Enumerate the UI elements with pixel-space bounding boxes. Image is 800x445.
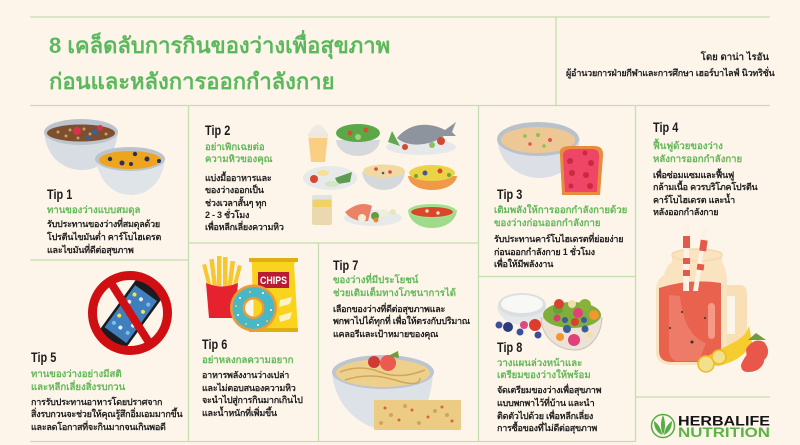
tip 6 text: และไม่ตอบสนองความหิว <box>202 383 296 393</box>
tip 8 text <box>497 339 602 434</box>
title <box>49 30 390 94</box>
tip 4 text: ฟื้นฟูด้วยของว่าง <box>653 140 723 152</box>
logo: Herbalife Nutrition <box>652 414 770 440</box>
icon: smoothie jar with fruit <box>656 225 768 372</box>
tip 1 text <box>46 186 161 256</box>
logo: Herbalife Nutrition: HERBALIFE <box>678 414 770 428</box>
tip 3 text: ก่อนออกกำลังกาย 1 ชั่วโมง <box>494 247 595 257</box>
tip 2 text: ของว่างออกเป็น <box>205 185 264 195</box>
tip 7 text: พกพาไปได้ทุกที่ เพื่อให้ตรงกับปริมาณ <box>333 316 470 326</box>
tip 3 text: รับประทานคาร์โบไฮเดรตที่ย่อยง่าย <box>494 234 623 244</box>
title: ก่อนและหลังการออกกำลังกาย <box>49 69 334 94</box>
tip 4 text: Tip 4 <box>653 119 678 135</box>
icon: fries, donut and chips: CHIPS <box>260 275 287 287</box>
tip 8 text: Tip 8 <box>497 339 522 355</box>
tip 1 text: และไขมันที่ดีต่อสุขภาพ <box>47 245 134 255</box>
tip 2 text: 2 - 3 ชั่วโมง <box>205 210 249 220</box>
tip 8 text: ติดตัวไปด้วย เพื่อหลีกเลี่ยง <box>497 411 593 421</box>
tip 7 text: Tip 7 <box>333 257 358 273</box>
tip 6 text: จะนำไปสู่การกินมากเกินไป <box>202 395 303 405</box>
title: 8 เคล็ดลับการกินของว่างเพื่อสุขภาพ <box>49 33 390 58</box>
tip 3 text: เพื่อให้มีพลังงาน <box>494 259 553 269</box>
tip 1 text: Tip 1 <box>47 186 72 202</box>
tip 6 text: อาหารพลังงานว่างเปล่า <box>202 370 289 380</box>
tip 1 text: ทานของว่างแบบสมดุล <box>47 204 140 216</box>
tip 3 text <box>494 186 627 269</box>
icon: tip 2 healthy food collection <box>303 122 457 228</box>
tip 2 text <box>205 122 284 232</box>
icon: cereal bowls <box>44 119 165 195</box>
logo: Herbalife Nutrition: NUTRITION <box>678 425 770 440</box>
tip 8 text: แบบพกพาไว้ที่บ้าน และนำ <box>497 398 594 408</box>
tip 5 text: สิ่งรบกวนจะช่วยให้คุณรู้สึกอิ่มเอมมากขึ้น <box>31 409 182 419</box>
tip 2 text: ช่วงเวลาสั้นๆ ทุก <box>205 198 266 208</box>
tip 3 text: ของว่างก่อนออกกำลังกาย <box>494 218 601 228</box>
tip 7 text: แคลอรีและเป้าหมายของคุณ <box>333 329 438 339</box>
tip 5 text: ทานของว่างอย่างมีสติ <box>31 368 122 380</box>
tip 4 text: เพื่อซ่อมแซมและฟื้นฟู <box>653 170 734 180</box>
tip 6 text <box>202 336 303 418</box>
tip 4 text <box>653 119 758 217</box>
tip 8 text: จัดเตรียมของว่างเพื่อสุขภาพ <box>497 385 601 395</box>
icon: oat bowl and granola bar <box>332 351 461 430</box>
tip 4 text: หลังออกกำลังกาย <box>653 207 718 217</box>
author credit: ผู้อำนวยการฝ่ายกีฬาและการศึกษา เฮอร์บาไลฟ์ นิวทริชั่น <box>566 68 774 78</box>
tip 4 text: คาร์โบไฮเดรต และน้ำ <box>653 195 735 205</box>
tip 8 text: วางแผนล่วงหน้าและ <box>497 358 582 368</box>
tip 1 text: รับประทานของว่างที่สมดุลด้วย <box>47 219 160 229</box>
tip 4 text: กล้ามเนื้อ ควรบริโภคโปรตีน <box>653 182 757 192</box>
author credit: โดย ดาน่า ไรอัน <box>701 52 769 63</box>
tip 6 text: และน้ำหนักที่เพิ่มขึ้น <box>202 408 277 418</box>
tip 2 text: เพื่อหลีกเลี่ยงความหิว <box>205 222 284 232</box>
tip 8 text: การซื้อของที่ไม่ดีต่อสุขภาพ <box>497 423 597 433</box>
tip 2 text: ความหิวของคุณ <box>205 154 273 164</box>
tip 5 text <box>31 349 183 432</box>
author credit <box>566 51 775 79</box>
icon: fries, donut and chips <box>202 256 298 332</box>
tip 5 text: และหลีกเลี่ยงสิ่งรบกวน <box>31 382 125 392</box>
tip 7 text <box>333 257 470 340</box>
tip 2 text: Tip 2 <box>205 122 230 138</box>
tip 8 text: เตรียมของว่างให้พร้อม <box>497 370 591 380</box>
tip 6 text: Tip 6 <box>202 336 227 352</box>
icon: no phone sign <box>92 276 168 352</box>
tip 5 text: และลดโอกาสที่จะกินมากจนเกินพอดี <box>31 422 166 432</box>
tip 1 text: โปรตีนไขมันต่ำ คาร์โบไฮเดรต <box>47 232 161 242</box>
tip 2 text: อย่าเพิกเฉยต่อ <box>205 142 265 152</box>
tip 2 text: แบ่งมื้ออาหารและ <box>205 173 271 183</box>
tip 3 text: Tip 3 <box>497 186 522 202</box>
tip 7 text: ช่วยเติมเต็มทางโภชนาการได้ <box>333 288 456 298</box>
icon: yogurt and fruit salad <box>496 293 602 350</box>
tip 7 text: ของว่างที่มีประโยชน์ <box>333 274 418 286</box>
tip 5 text: Tip 5 <box>31 349 56 365</box>
icon: porridge bowl and jam toast <box>497 122 603 195</box>
tip 3 text: เติมพลังให้การออกกำลังกายด้วย <box>494 204 627 216</box>
tip 4 text: หลังการออกกำลังกาย <box>653 154 742 164</box>
tip 6 text: อย่าหลงกลความอยาก <box>202 354 293 366</box>
tip 7 text: เลือกของว่างที่ดีต่อสุขภาพและ <box>333 304 445 314</box>
tip 5 text: การรับประทานอาหารโดยปราศจาก <box>31 397 162 407</box>
